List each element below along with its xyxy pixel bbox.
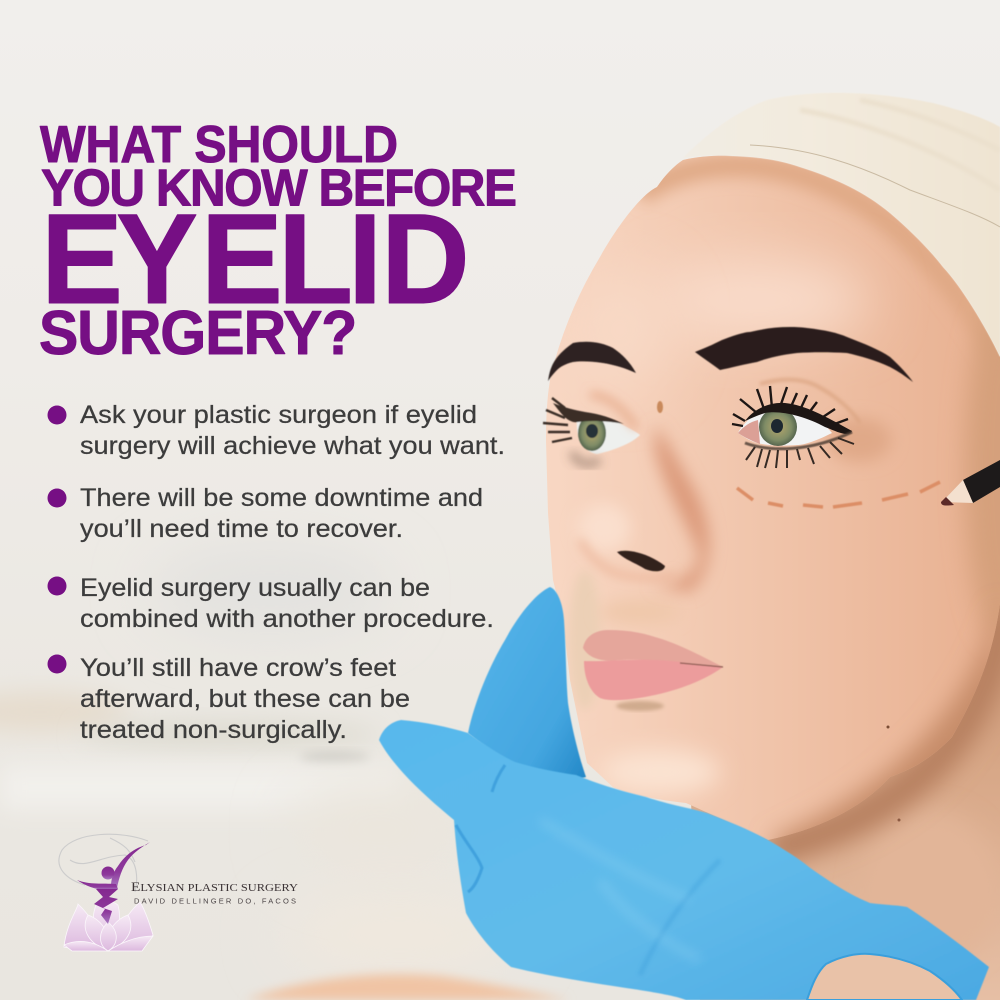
bullet 2: you’ll need time to recover. (80, 515, 403, 543)
bullet 4: treated non-surgically. (80, 716, 347, 744)
face shading (569, 165, 1000, 880)
bullet 3: Eyelid surgery usually can be (80, 574, 430, 602)
skin at wrist (807, 954, 962, 1000)
right eyebrow (695, 327, 913, 382)
pencil (941, 460, 1000, 506)
right eye (732, 380, 860, 468)
title: WHAT SHOULD (40, 115, 398, 173)
lotus flower (64, 901, 153, 951)
swirl ribbons (59, 834, 148, 892)
bullet 3 (48, 574, 494, 633)
bullet 2: There will be some downtime and (80, 484, 483, 512)
surgical dashed line (737, 482, 940, 507)
face skin (546, 156, 1000, 840)
logo: Elysian Plastic Surgery (59, 834, 298, 951)
bullet 1: Ask your plastic surgeon if eyelid (80, 401, 477, 429)
logo subtitle: DAVID DELLINGER DO, FACOS (134, 896, 296, 906)
bullet 3: combined with another procedure. (80, 605, 494, 633)
bullet 4 (48, 654, 410, 744)
shoulder (245, 974, 570, 1000)
hand (379, 720, 989, 1000)
bullet 2 (48, 484, 483, 543)
left eyebrow (548, 342, 636, 381)
upper fingers (468, 587, 586, 790)
title: EYELID (41, 187, 470, 331)
headband (683, 93, 1000, 357)
neck (690, 590, 1000, 1000)
nose (578, 504, 675, 578)
lips (583, 630, 723, 700)
title (39, 115, 517, 367)
blue glove (379, 587, 989, 1000)
woman's face and headband (245, 93, 1000, 1000)
freckle (657, 401, 663, 413)
bullet 4: afterward, but these can be (80, 685, 410, 713)
title: YOU KNOW BEFORE (41, 158, 517, 217)
bullet list (48, 401, 505, 744)
bullet 1: surgery will achieve what you want. (80, 432, 505, 460)
left eye (543, 395, 640, 464)
bullet 1 (48, 401, 505, 460)
bullet 4: You’ll still have crow’s feet (80, 654, 396, 682)
glove wrinkles (456, 765, 505, 892)
title: SURGERY? (39, 298, 357, 367)
logo name: ELYSIAN PLASTIC SURGERY (131, 879, 298, 894)
dancer figure (77, 842, 150, 924)
